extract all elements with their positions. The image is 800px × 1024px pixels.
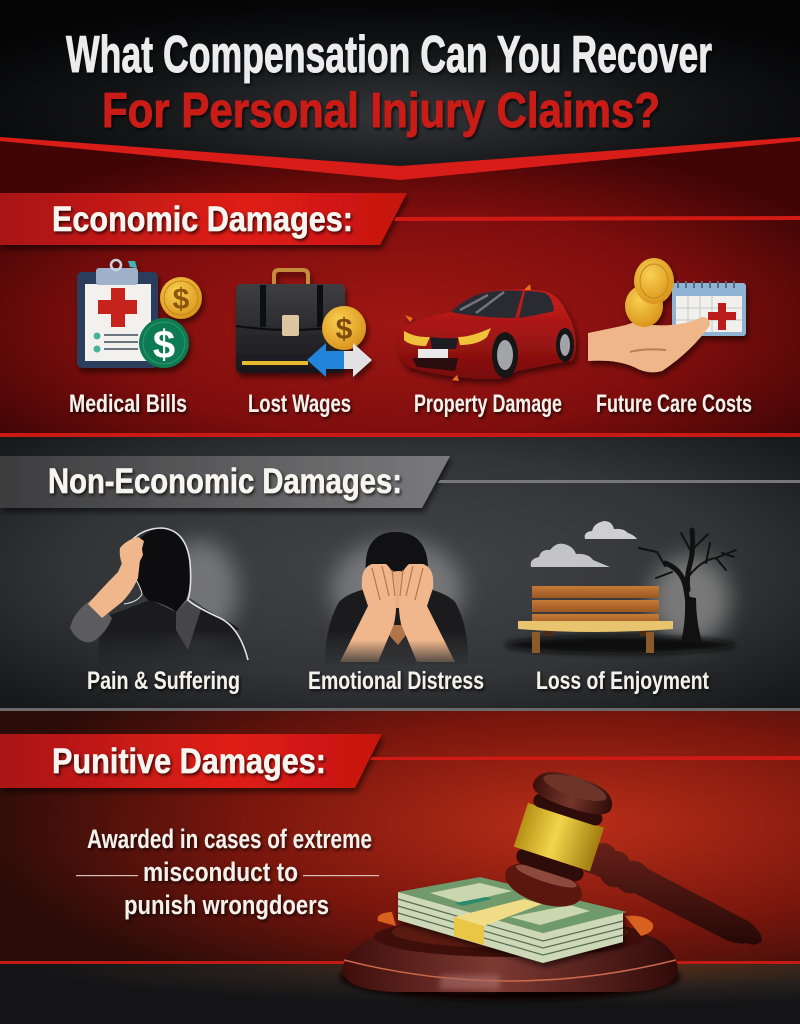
text block: punitive damages description	[76, 824, 379, 920]
section heading: non-economic damages: Non-Economic Damages:	[48, 462, 402, 501]
item: future care costs	[588, 258, 752, 418]
item: property damage	[399, 284, 576, 418]
cash stack	[398, 877, 627, 963]
title	[66, 26, 712, 138]
icon: gavel, sound block and cash	[340, 765, 762, 1001]
gavel head	[499, 765, 617, 915]
section bottom divider	[0, 961, 800, 964]
icon: damaged red car	[399, 284, 576, 381]
label: Loss of Enjoyment	[536, 667, 710, 695]
panel: punitive damages background	[0, 710, 800, 964]
section heading: non-economic damages	[0, 456, 800, 508]
panel: economic damages background	[0, 140, 800, 436]
section heading: punitive damages	[0, 734, 800, 788]
item: loss of enjoyment	[505, 521, 736, 695]
icon: clipboard with coins: $	[173, 283, 190, 316]
economic section bottom divider	[0, 433, 800, 437]
item: pain and suffering	[70, 528, 252, 695]
header chevron divider	[0, 137, 800, 180]
sound block	[340, 912, 680, 1001]
icon: clipboard with coins	[77, 260, 202, 368]
gavel handle	[584, 843, 762, 945]
item: lost wages	[236, 270, 372, 418]
label: Emotional Distress	[308, 667, 484, 695]
label: Pain & Suffering	[87, 667, 240, 695]
panel: bottom floor	[0, 963, 800, 1024]
icon: briefcase with coin and arrows: $	[336, 313, 353, 346]
section heading: economic damages	[0, 193, 800, 245]
section heading: punitive damages: Punitive Damages:	[52, 742, 326, 781]
icon: briefcase with coin and arrows	[236, 270, 372, 377]
label: Property Damage	[414, 390, 562, 418]
icon: bench, bare tree and clouds	[505, 521, 736, 654]
text block: punitive damages description: punish wrongdoers	[124, 890, 329, 920]
icon: person covering face	[325, 532, 468, 665]
icon: man holding his head	[70, 528, 252, 668]
item: emotional distress	[308, 532, 484, 695]
section heading: economic damages: Economic Damages:	[52, 200, 353, 239]
text block: punitive damages description: misconduct to	[143, 857, 298, 887]
title: For Personal Injury Claims?	[102, 84, 660, 138]
item: medical bills	[69, 260, 202, 418]
panel: header background	[0, 0, 800, 185]
label: Medical Bills	[69, 390, 187, 418]
icon: hand with coins and calendar	[588, 258, 746, 372]
non-economic section bottom divider	[0, 708, 800, 711]
icon: clipboard with coins: $	[153, 323, 175, 367]
label: Lost Wages	[248, 390, 351, 418]
text block: punitive damages description: Awarded in cases of extreme	[87, 824, 372, 854]
panel: non-economic damages background	[0, 436, 800, 710]
